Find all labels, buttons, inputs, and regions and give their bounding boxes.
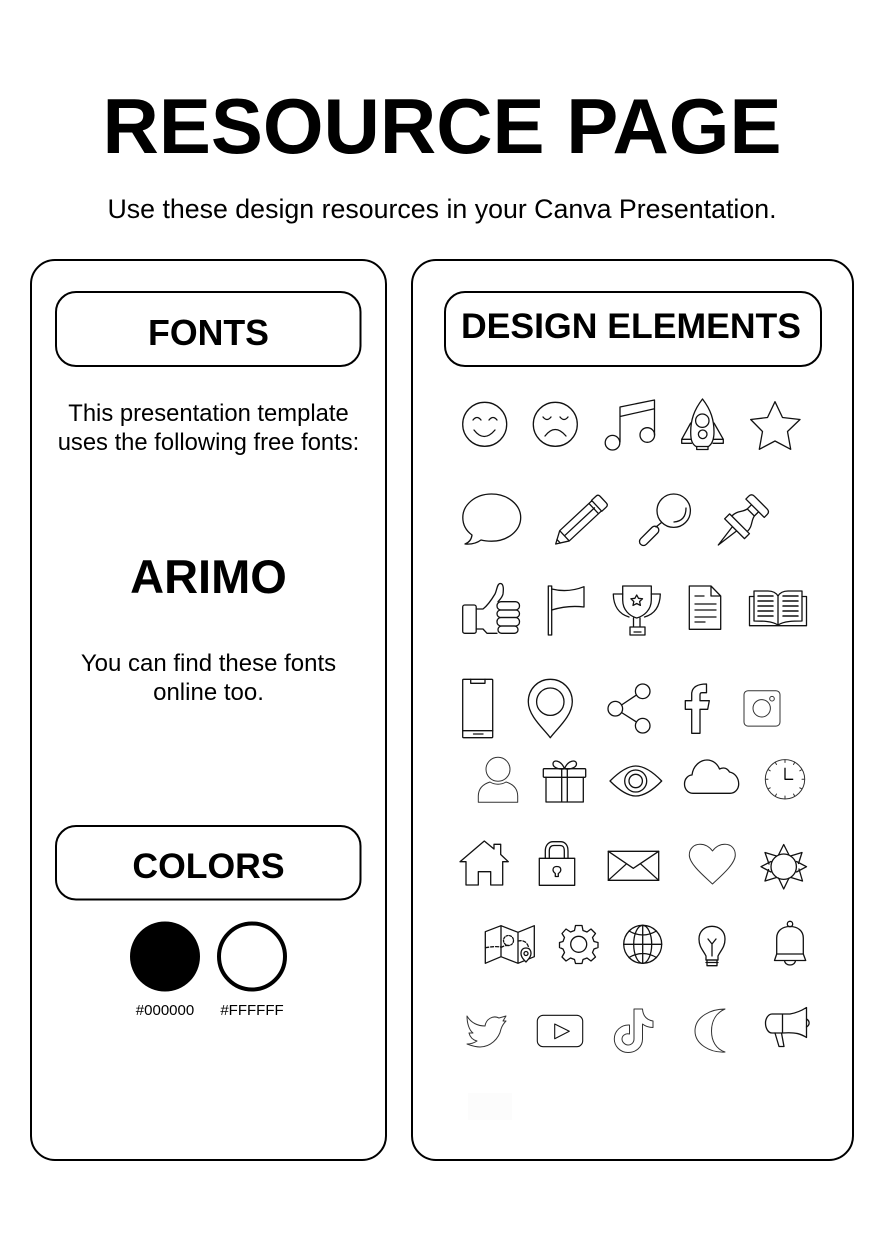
heading: colors <box>56 826 360 900</box>
heading: colors: COLORS <box>132 846 285 886</box>
icon: push pin <box>708 493 771 555</box>
icon: thumbs up <box>463 583 520 633</box>
icon: flag <box>548 586 584 635</box>
icon: megaphone <box>766 1008 809 1046</box>
icon: cloud <box>684 760 739 793</box>
icon: speech bubble <box>463 494 521 544</box>
text block: find fonts online: online too. <box>153 679 264 706</box>
icon: envelope <box>608 851 659 880</box>
swatch: black <box>130 922 200 1019</box>
icon: music note <box>605 400 655 450</box>
icon: pencil <box>551 494 608 549</box>
icon: rocket <box>682 399 723 450</box>
icon: open book <box>750 591 806 626</box>
icon: sad face <box>533 402 577 446</box>
heading: design elements: DESIGN ELEMENTS <box>461 306 801 346</box>
icon: eye <box>610 766 662 796</box>
icon: padlock <box>539 842 575 885</box>
swatch: white: #FFFFFF <box>220 1002 284 1019</box>
icon: document <box>689 586 721 629</box>
icon: bell <box>774 921 806 965</box>
icon: gear <box>560 926 598 964</box>
font name: Arimo: ARIMO <box>130 550 287 603</box>
icon: globe <box>624 925 662 963</box>
title: RESOURCE PAGE <box>102 82 782 170</box>
icon: trophy <box>613 586 660 635</box>
icon: twitter bird <box>467 1016 506 1047</box>
icon: clock <box>765 760 805 799</box>
text block: font intro: uses the following free fonts: <box>58 429 359 456</box>
icon: star <box>751 402 800 449</box>
icon: light bulb <box>699 926 725 966</box>
panel: fonts and colors <box>31 260 386 1160</box>
icon: instagram <box>744 691 780 726</box>
panel: design elements <box>412 260 853 1160</box>
faint blank placeholder <box>468 1093 512 1120</box>
text block: font intro: This presentation template <box>68 400 349 427</box>
text block: find fonts online: You can find these fonts <box>81 650 336 677</box>
icon: location pin <box>528 679 572 738</box>
swatch: black: #000000 <box>136 1002 194 1019</box>
heading: fonts <box>56 292 360 366</box>
icon: share <box>608 684 650 733</box>
swatch: white <box>219 924 285 1019</box>
heading: fonts: FONTS <box>148 313 269 353</box>
icon: video play button <box>537 1015 583 1047</box>
subtitle: Use these design resources in your Canva Presentation. <box>107 194 777 224</box>
icon: tiktok <box>614 1009 653 1052</box>
icon: user <box>478 757 518 802</box>
heading: design elements <box>445 292 821 366</box>
icon: house <box>460 841 508 885</box>
icon: crescent moon <box>695 1009 725 1052</box>
icon: smartphone <box>463 679 493 738</box>
icon: heart <box>689 844 735 884</box>
icon: folded map <box>485 926 534 963</box>
icon: magnifying glass <box>638 494 690 547</box>
icon: facebook <box>685 684 709 733</box>
icon: smiling face <box>463 402 507 446</box>
icon: sun <box>761 844 806 889</box>
icon: gift box <box>543 761 586 802</box>
